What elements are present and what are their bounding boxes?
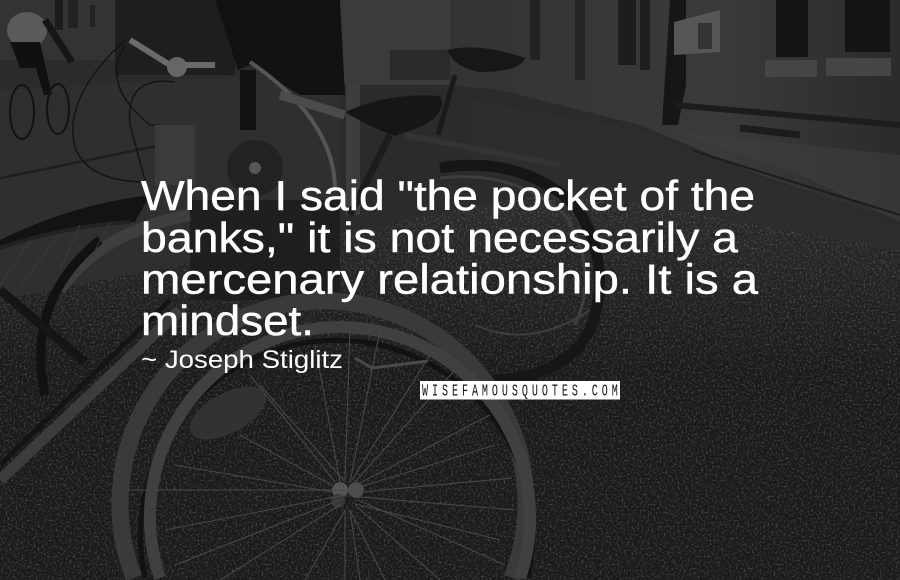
- watermark logo: WISEFAMOUSQUOTES.COM: [422, 382, 618, 402]
- building wall at right: [450, 0, 900, 222]
- quote line 1: When I said "the pocket of the: [141, 172, 755, 219]
- cyclist in the distance: [7, 12, 72, 139]
- sidewalk: [470, 100, 900, 250]
- far buildings at top left: [0, 0, 460, 85]
- brake lever on foreground wheel: [355, 358, 428, 368]
- gravel texture: [0, 190, 900, 580]
- quote text: [141, 172, 759, 344]
- rear parked wheel: [440, 165, 600, 380]
- parked bicycle frame and brake cables: [73, 40, 560, 300]
- quote line 2: banks," it is not necessarily a: [141, 214, 739, 261]
- mudguard blade behind the wheel: [182, 376, 274, 450]
- stone foundation: [670, 105, 900, 222]
- quote line 3: mercenary relationship. It is a: [141, 256, 759, 302]
- building windows and pole: [530, 0, 891, 125]
- spokes: [128, 330, 515, 580]
- attribution: ~ Joseph Stiglitz: [141, 346, 343, 374]
- hub: [331, 482, 364, 508]
- tyre and rim: [120, 301, 532, 578]
- bicycle saddle, rear: [447, 47, 525, 72]
- left wheel and frame: [0, 215, 190, 480]
- road crack: [0, 140, 185, 178]
- ground gravel at lower part: [0, 190, 900, 580]
- pavement at left: [0, 70, 340, 300]
- quote line 4: mindset.: [141, 297, 314, 344]
- front fender, left: [0, 195, 150, 248]
- large foreground wheel: [120, 301, 532, 580]
- bicycle saddle, front: [345, 95, 442, 136]
- dark post and figure at top centre: [215, 0, 345, 130]
